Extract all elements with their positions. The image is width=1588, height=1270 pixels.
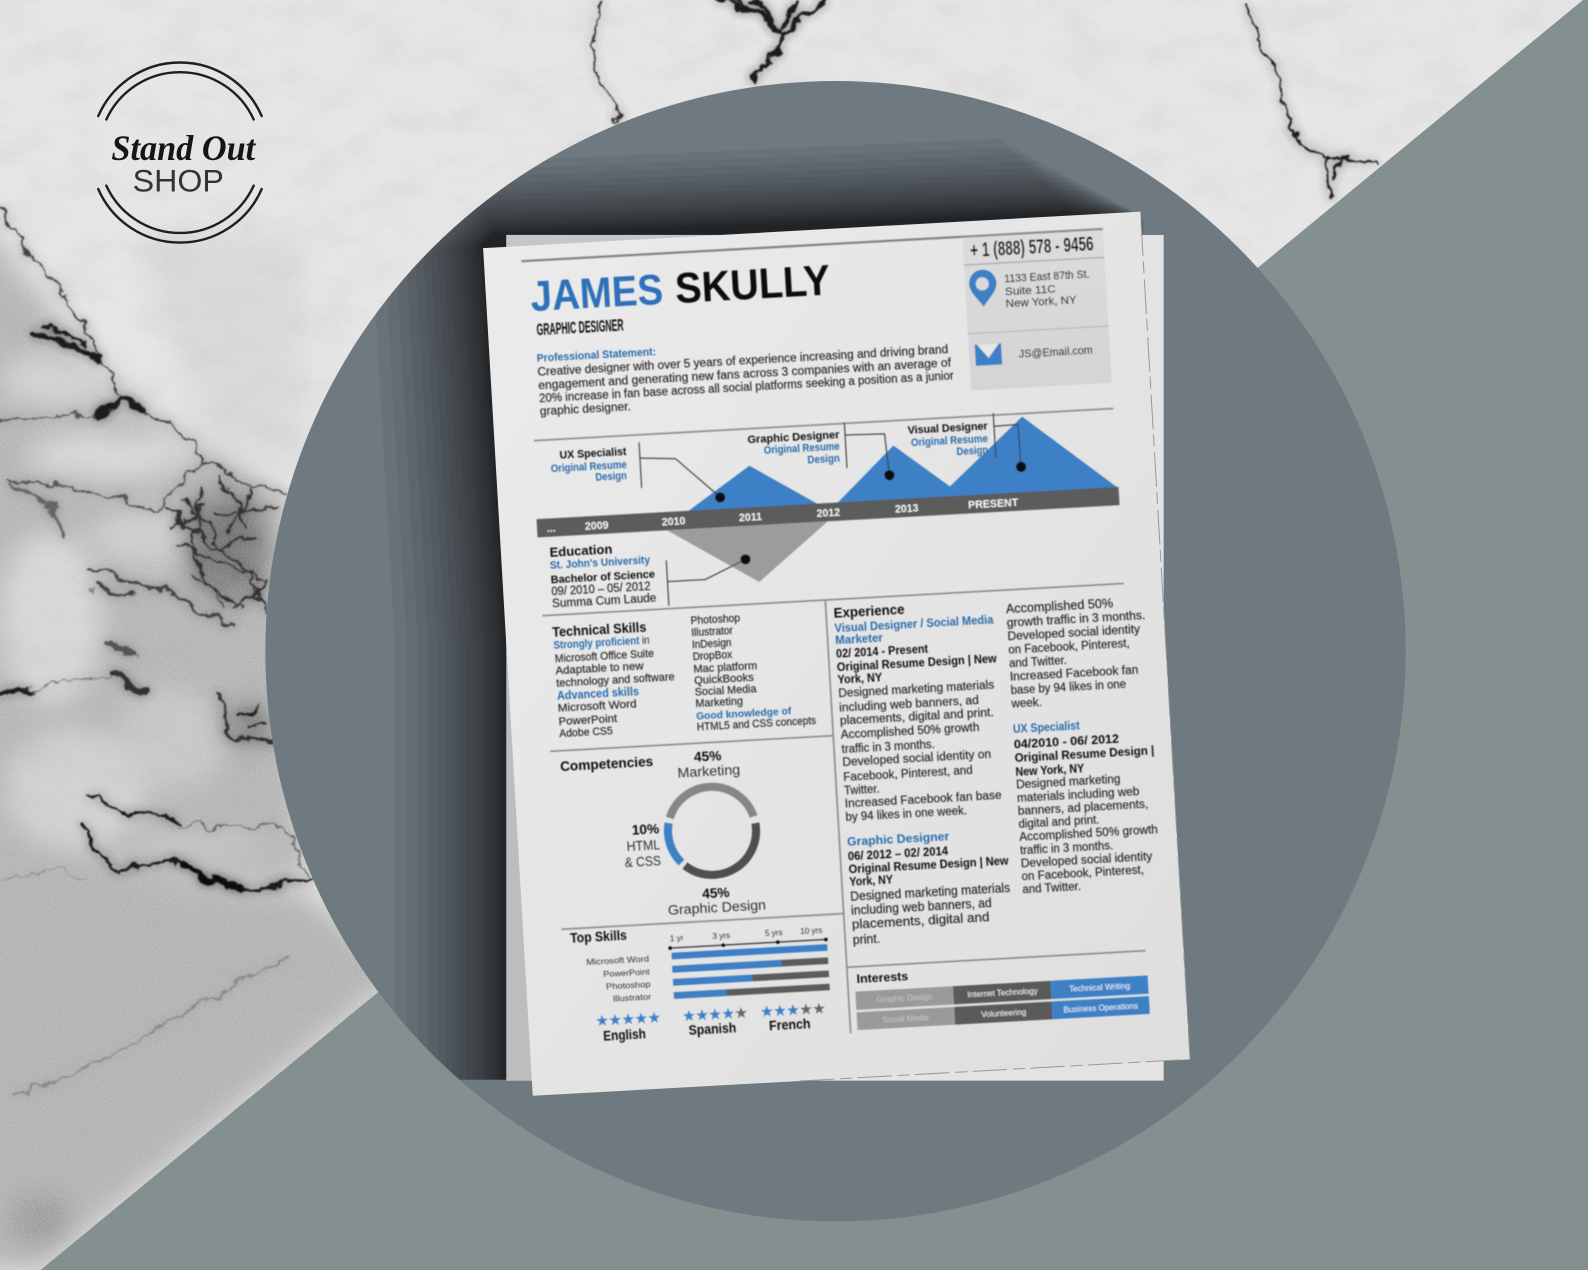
experience column one: traffic in 3 months. [841,738,935,756]
experience column one: Original Resume Design | New [848,854,1010,876]
experience column one: placements, digital and print. [840,706,994,728]
top rule [521,237,962,261]
technical skills: Illustrator [691,625,734,639]
experience column one: Developed social identity on [842,748,991,769]
experience column one: print. [852,932,881,947]
skill labels: Photoshop [606,979,651,991]
interests: Interests [856,969,909,986]
language ratings: English [603,1026,646,1044]
skill labels: Illustrator [612,991,652,1004]
competencies donut chart: & CSS [624,853,662,871]
experience column two: Accomplished 50% [1006,596,1114,616]
language ratings [595,999,827,1044]
competencies donut chart: 45% [694,748,722,765]
education block: St. John's University [550,555,650,572]
milestone dots [714,462,1031,566]
interests: Technical Writing [1069,982,1130,994]
label: UX Specialist [550,446,628,486]
Stand Out Shop logo [98,62,262,243]
experience column two: on Facebook, Pinterest, [1008,637,1130,657]
technical skills: DropBox [692,649,733,663]
language ratings: French [769,1016,811,1033]
experience column one: Graphic Designer [847,829,950,849]
experience column two: traffic in 3 months. [1020,839,1113,857]
skill labels [586,953,652,1005]
label: Visual Designer [907,420,990,461]
skill labels: Microsoft Word [586,953,649,967]
technical skills: Microsoft Word [557,698,637,715]
interests: Volunteering [981,1008,1026,1019]
experience column one: Facebook, Pinterest, and [843,764,973,784]
experience column two: Developed social identity [1020,850,1153,870]
competencies donut chart: Competencies [560,754,654,775]
label: Graphic Designer [747,429,842,470]
experience column two: week. [1010,696,1042,710]
English stars: ★★★★★ [595,1008,662,1030]
experience column two [1005,595,1162,896]
label: Graphic Designer: Graphic Designer [747,429,841,447]
axis [668,926,828,950]
top skills bar chart [570,917,831,1006]
professional statement: graphic designer. [539,400,631,418]
slate circle [265,81,1406,1221]
technical skills: HTML5 and CSS concepts [696,715,816,733]
name heading [529,256,831,321]
experience column one: Accomplished 50% growth [840,721,980,742]
experience column two: base by 94 likes in one [1010,678,1126,697]
experience column one: including web banners, ad [851,896,992,918]
year labels: 2009 [585,519,609,533]
label: Visual Designer: Original Resume [911,433,988,449]
axis: 3 yrs [712,931,730,941]
interests: Internet Technology [967,987,1039,1000]
back resume page [506,235,1164,1081]
address: 1133 East 87th St. [1004,268,1090,285]
experience column one: 06/ 2012 – 02/ 2014 [848,845,949,863]
skill labels: PowerPoint [603,967,651,979]
technical skills [552,609,816,741]
axis: 1 yr [670,934,684,944]
education block: Summa Cum Laude [552,592,657,611]
timeline band [536,487,1120,537]
experience column two: growth traffic in 3 months. [1006,609,1146,630]
experience column one: Marketer [835,632,884,647]
contact panel: New York, NY [1005,294,1077,310]
technical skills: Adobe CS5 [559,725,613,740]
experience column one: Visual Designer / Social Media [834,613,994,635]
experience column one: York, NY [849,873,894,889]
job title: GRAPHIC DESIGNER [536,317,624,339]
technical skills: Mac platform [693,660,758,675]
experience column one: Original Resume Design | New [836,652,998,674]
experience column two: digital and print. [1018,813,1100,831]
label: UX Specialist: Original Resume [550,459,627,475]
Spanish stars: ★★★★★ [682,1003,749,1025]
experience column two: Designed marketing [1016,773,1121,791]
experience column two: and Twitter. [1022,880,1081,896]
label: UX Specialist: Design [595,470,627,484]
technical skills: Photoshop [690,613,741,627]
year labels: 2010 [661,515,686,528]
label: Visual Designer: Design [956,445,988,458]
icon: envelope [975,343,1002,366]
label: Graphic Designer: Original Resume [763,441,840,457]
experience column one [833,597,1014,947]
phone number: + 1 (888) 578 - 9456 [970,233,1094,262]
experience column one: by 94 likes in one week. [845,804,967,824]
top skills bar chart: Top Skills [570,928,628,946]
technical skills: Technical Skills [552,620,647,640]
experience column two: UX Specialist [1013,720,1080,736]
experience column two: Accomplished 50% growth [1019,823,1158,844]
label: Graphic Designer: Design [807,453,840,467]
experience column two: Original Resume Design | [1014,744,1155,765]
year labels: 2013 [895,502,919,515]
professional statement: Creative designer with over 5 years of experience increasing and driving brand [537,343,948,379]
name heading: JAMES [529,266,664,321]
technical skills: QuickBooks [694,672,754,687]
year labels: PRESENT [968,497,1019,511]
professional statement: Professional Statement: [536,346,656,365]
logo rings [98,62,262,243]
resume front page [483,212,1190,1096]
label: Visual Designer: Visual Designer [907,420,989,437]
experience column one: including web banners, ad [839,694,979,714]
name heading: SKULLY [674,256,831,313]
technical skills: Microsoft Office Suite [554,648,654,665]
competencies donut chart: 45% [702,885,730,902]
competencies donut chart: Graphic Design [667,897,766,919]
education block: 09/ 2010 – 05/ 2012 [551,580,651,598]
experience column two: on Facebook, Pinterest, [1021,864,1144,883]
bars [671,944,830,999]
French stars: ★★★★★ [760,999,826,1021]
professional statement: 20% increase in fan base across all social platforms seeking a position as a junior [539,369,954,405]
experience column two: New York, NY [1015,762,1085,779]
experience column one: 02/ 2014 - Present [836,643,929,661]
technical skills: Marketing [695,695,743,710]
experience column two: 04/2010 - 06/ 2012 [1013,733,1119,751]
technical skills: Strongly proficient in [553,634,650,652]
icon: map pin [968,269,998,307]
interests [854,956,1150,1030]
experience peaks [685,462,819,512]
experience column two: and Twitter. [1009,654,1067,670]
education block [549,539,657,611]
technical skills: technology and software [556,671,675,690]
experience column one: placements, digital and [852,910,990,932]
education peak [667,521,831,587]
email: JS@Email.com [1019,344,1093,360]
interests: Graphic Design [876,993,933,1005]
career timeline chart [532,406,1124,613]
experience column one: Experience [833,602,905,621]
competencies donut chart: HTML [626,837,661,855]
experience column two: banners, ad placements, [1017,797,1149,818]
education block: Education [549,542,613,560]
year labels [546,497,1019,535]
axis: 10 yrs [800,926,822,936]
experience column two: materials including web [1017,785,1140,805]
logo script text: Stand Out [111,128,257,168]
logo shop text: SHOP [133,163,224,198]
technical skills: InDesign [692,637,732,651]
experience column two: Increased Facebook fan [1010,664,1139,684]
contact panel: Suite 11C [1005,283,1056,298]
contact panel [962,229,1112,391]
competencies donut chart [560,746,766,924]
experience column two: Developed social identity [1007,623,1141,643]
year labels: 2011 [739,511,762,524]
professional statement [536,330,955,418]
experience column one: Twitter. [844,782,880,797]
interests: Social Media [882,1013,930,1025]
year labels: ... [546,522,556,535]
language ratings: Spanish [688,1020,737,1038]
technical skills: Social Media [694,683,757,698]
technical skills: PowerPoint [558,713,618,728]
professional statement: engagement and generating new fans across 3 companies with an average of [538,356,952,392]
label: UX Specialist: UX Specialist [559,446,627,462]
experience column one: Increased Facebook fan base [844,789,1002,811]
technical skills: Adaptable to new [555,660,644,677]
experience column one: Designed marketing materials [838,679,995,700]
experience column one: York, NY [837,671,883,687]
interests: Business Operations [1063,1001,1138,1015]
year labels: 2012 [816,507,841,520]
experience column one: Designed marketing materials [850,881,1010,904]
axis: 5 yrs [765,928,783,938]
connectors [638,412,1028,607]
competencies donut chart: 10% [631,821,660,838]
technical skills: Advanced skills [557,685,639,703]
paper shadow [373,139,1144,1080]
competencies donut chart: Marketing [677,762,741,782]
technical skills: Good knowledge of [696,706,792,722]
education block: Bachelor of Science [550,569,655,586]
